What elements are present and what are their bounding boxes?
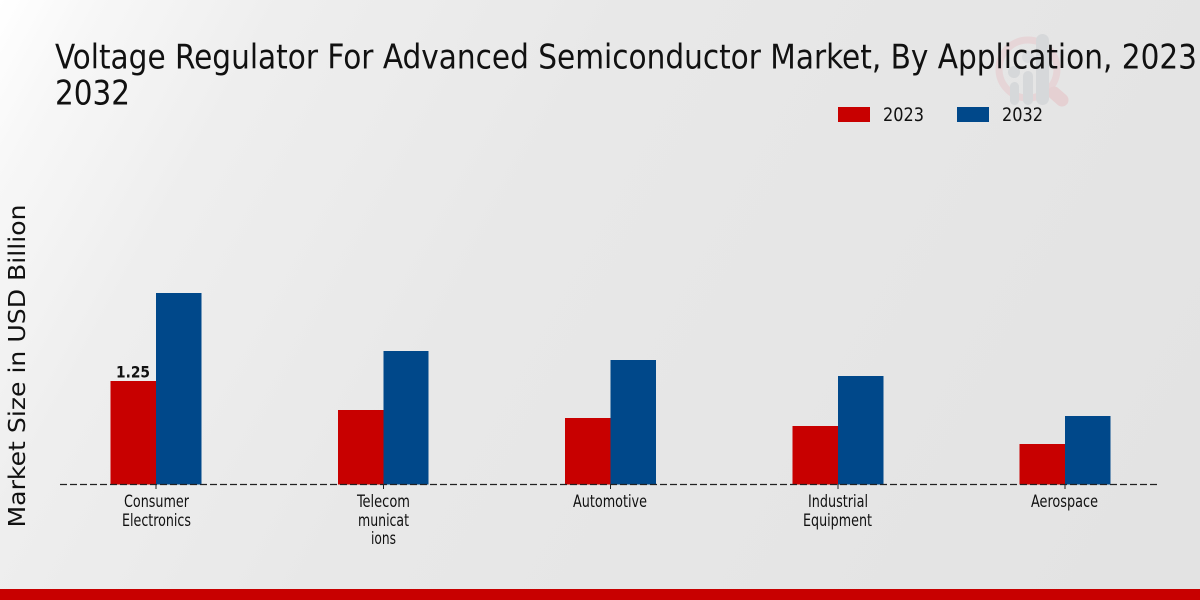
- group: Automotive: [565, 360, 656, 484]
- legend item: 2023: 2023: [883, 105, 924, 126]
- legend item: 2032: 2032: [1002, 105, 1043, 126]
- title: Voltage Regulator For Advanced Semiconductor Market, By Application, 2023: [55, 38, 1197, 76]
- title: [55, 38, 1197, 112]
- legend item: 2023: [838, 105, 924, 126]
- y axis label: Market Size in USD Billion: [3, 205, 31, 528]
- baseline: [60, 484, 1160, 486]
- label: Industrial Equipment: Equipment: [803, 511, 872, 530]
- label: Industrial Equipment: [803, 492, 872, 530]
- label: Telecommunications: municat: [358, 511, 409, 530]
- category labels: [122, 492, 1098, 548]
- group: Industrial Equipment: [792, 376, 884, 484]
- group: Consumer Electronics: [110, 293, 202, 484]
- label: Telecommunications: Telecom: [356, 492, 410, 511]
- title: 2032: [55, 74, 130, 112]
- label: Aerospace: Aerospace: [1031, 492, 1098, 511]
- label: Industrial Equipment: Industrial: [808, 492, 868, 511]
- legend: [838, 105, 1043, 126]
- group: Aerospace: [1020, 416, 1110, 484]
- label: Automotive: Automotive: [573, 492, 647, 511]
- label: Telecommunications: ions: [371, 529, 396, 548]
- footer band: [0, 589, 1200, 600]
- label: Consumer Electronics: Consumer: [124, 492, 190, 511]
- bar chart: [110, 293, 1110, 484]
- icon: watermark magnifier with bars: [999, 34, 1062, 105]
- value label: 1.25: [116, 362, 150, 382]
- label: Consumer Electronics: [122, 492, 191, 530]
- label: Telecommunications: [356, 492, 410, 548]
- label: Consumer Electronics: Electronics: [122, 511, 191, 530]
- legend item: 2032: [957, 105, 1043, 126]
- group: Telecommunications: [338, 351, 428, 484]
